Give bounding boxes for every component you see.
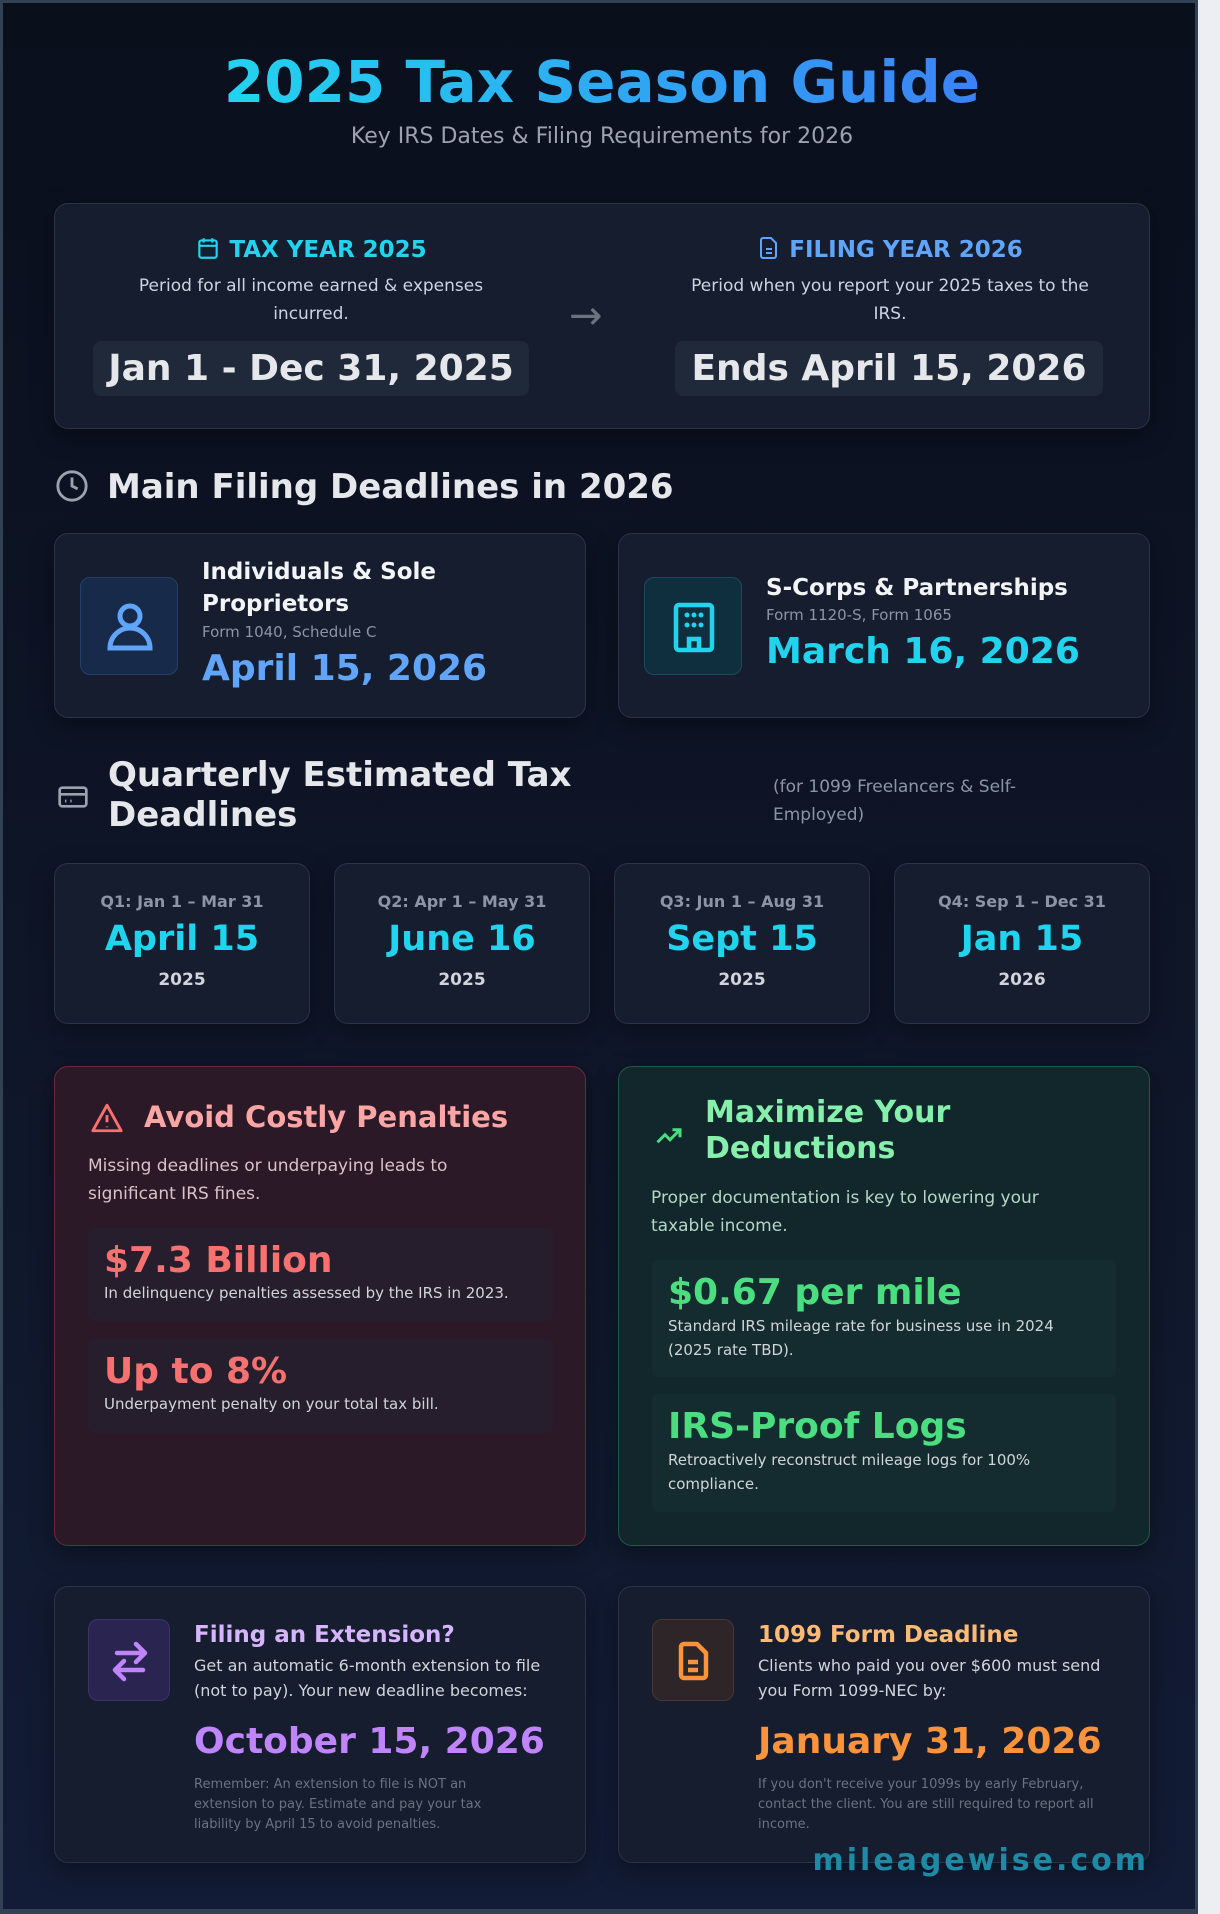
quarter 3 [614, 863, 870, 1024]
icon: warning [91, 1104, 123, 1132]
description: Period for all income earned & expenses incurred. [139, 276, 483, 324]
quarter 3: 2025 [718, 970, 766, 990]
title: 2025 Tax Season Guide [224, 48, 980, 116]
text: Filing an Extension? [194, 1622, 455, 1648]
stat: mileage rate: Standard IRS mileage rate for business use in 2024 (2025 rate TBD). [668, 1317, 1054, 1359]
stat: 7.3 billion [88, 1228, 553, 1321]
text: individuals: Individuals & Sole Proprietors [202, 559, 436, 617]
text: Get an automatic 6-month extension to file (not to pay). Your new deadline becomes: [194, 1656, 540, 1700]
quarter 4: Jan 15 [961, 919, 1083, 959]
tax year column [139, 237, 483, 324]
panel: extension [54, 1586, 586, 1863]
panel: individuals [54, 533, 586, 718]
heading: filing year: FILING YEAR 2026 [789, 237, 1023, 263]
stat: 7.3 billion: In delinquency penalties assessed by the IRS in 2023. [104, 1284, 509, 1302]
text: individuals: Form 1040, Schedule C [202, 623, 376, 641]
quarter 2: June 16 [388, 919, 536, 959]
text [194, 1622, 545, 1832]
quarter cards: 2025 [158, 970, 206, 990]
date box: filing year: Ends April 15, 2026 [691, 348, 1087, 389]
heading: tax year: TAX YEAR 2025 [229, 237, 427, 263]
date box: filing year [675, 341, 1103, 396]
icon: trending [656, 1128, 682, 1144]
quarter cards [54, 863, 310, 1024]
date box: tax year [93, 341, 529, 396]
panel: s-corps [618, 533, 1150, 718]
description: Period when you report your 2025 taxes to the IRS. [691, 276, 1089, 324]
watermark: mileagewise.com [812, 1843, 1149, 1878]
quarter 2 [334, 863, 590, 1024]
text: Clients who paid you over $600 must send you Form 1099-NEC by: [758, 1656, 1100, 1700]
icon: card [58, 786, 88, 808]
stat: logs: Retroactively reconstruct mileage logs for 100% compliance. [668, 1451, 1030, 1493]
stat: 8%: Up to 8% [104, 1351, 287, 1392]
stat: 7.3 billion: $7.3 Billion [104, 1240, 333, 1281]
quarter 4: Q4: Sep 1 – Dec 31 [938, 892, 1106, 911]
subtitle: Key IRS Dates & Filing Requirements for 2026 [351, 124, 853, 149]
panel: 1099 [618, 1586, 1150, 1863]
quarter 2: Q2: Apr 1 – May 31 [378, 892, 546, 911]
quarter 4 [894, 863, 1150, 1024]
heading: Avoid Costly Penalties [144, 1100, 508, 1134]
text [756, 1622, 1102, 1832]
heading: main filing deadlines: Main Filing Deadlines in 2026 [107, 467, 674, 507]
description: Missing deadlines or underpaying leads to significant IRS fines. [88, 1156, 447, 1204]
heading text: Quarterly Estimated Tax Deadlines [108, 755, 571, 835]
icon: arrows [88, 1619, 170, 1701]
stat: mileage rate [652, 1260, 1116, 1377]
quarter 4: 2026 [998, 970, 1046, 990]
text: 1099 Form Deadline [758, 1622, 1018, 1648]
stat: logs [652, 1394, 1116, 1512]
stat: 8%: Underpayment penalty on your total tax bill. [104, 1395, 439, 1413]
panel: tax year vs filing year [54, 203, 1150, 429]
icon: building [644, 577, 742, 675]
quarter cards: April 15 [105, 919, 259, 959]
quarter cards: Q1: Jan 1 – Mar 31 [100, 892, 264, 911]
quarter 2: 2025 [438, 970, 486, 990]
text: s-corps: March 16, 2026 [766, 631, 1080, 672]
heading: Maximize Your Deductions [705, 1095, 950, 1166]
stat: logs: IRS-Proof Logs [668, 1406, 967, 1447]
heading: quarterly [58, 755, 1016, 835]
text: individuals [202, 559, 487, 689]
text: individuals: April 15, 2026 [202, 648, 487, 689]
quarter 3: Q3: Jun 1 – Aug 31 [660, 892, 824, 911]
text: s-corps [766, 575, 1080, 672]
icon: document [652, 1619, 734, 1701]
text: s-corps: S-Corps & Partnerships [766, 575, 1068, 601]
panel: deductions [618, 1066, 1150, 1546]
panel: penalties [54, 1066, 586, 1546]
filing year column [691, 237, 1089, 324]
icon: person [80, 577, 178, 675]
text: Remember: An extension to file is NOT an extension to pay. Estimate and pay your tax liability by April 15 to avoid penalties. [194, 1777, 481, 1832]
text: If you don't receive your 1099s by early February, contact the client. You are still required to report all income. [758, 1777, 1094, 1832]
date box: tax year: Jan 1 - Dec 31, 2025 [108, 348, 514, 389]
text: January 31, 2026 [758, 1721, 1102, 1762]
quarter 3: Sept 15 [666, 919, 818, 959]
text: s-corps: Form 1120-S, Form 1065 [766, 606, 952, 624]
stat: mileage rate: $0.67 per mile [668, 1272, 961, 1313]
stat: 8% [88, 1339, 553, 1433]
arrow: → [569, 293, 603, 339]
description: Proper documentation is key to lowering your taxable income. [651, 1188, 1039, 1236]
text: October 15, 2026 [194, 1721, 545, 1762]
note: (for 1099 Freelancers & Self-Employed) [773, 777, 1016, 825]
